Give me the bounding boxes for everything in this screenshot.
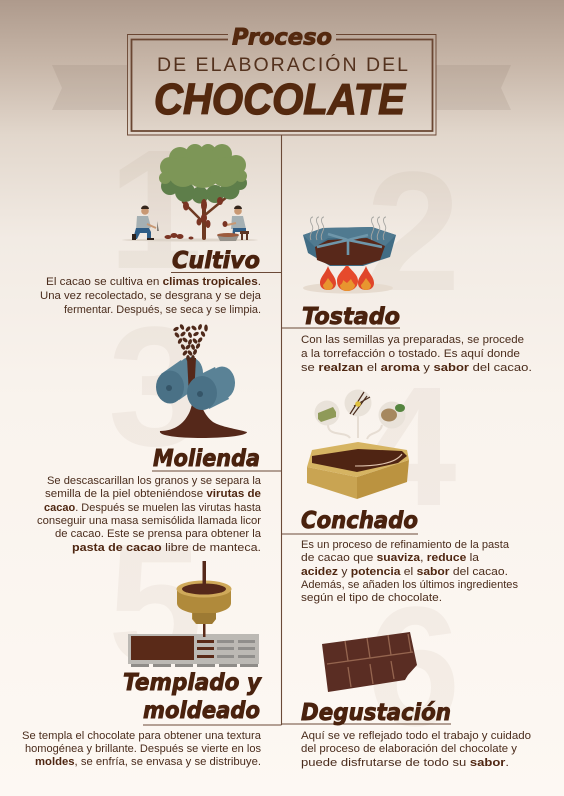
illustration: molienda, rollers and beans bbox=[156, 324, 247, 438]
left roller bbox=[156, 357, 203, 404]
illustration: cultivo, tree and farmers bbox=[122, 144, 258, 242]
text: Templado: Se templa el chocolate para obtener una textura bbox=[22, 730, 262, 742]
tray rim bbox=[307, 442, 409, 477]
falling stream bbox=[187, 358, 196, 396]
tray bbox=[307, 467, 357, 499]
text: Molienda: Se descascarillan los granos y se separa la bbox=[47, 475, 262, 487]
text: Cultivo: El cacao se cultiva en climas tropicales . bbox=[46, 276, 261, 288]
heading: Cultivo: Cultivo bbox=[172, 248, 260, 274]
chocolate in tray bbox=[312, 449, 407, 472]
text: Conchado: Es un proceso de refinamiento de la pasta bbox=[301, 539, 510, 551]
heading: Tostado: Tostado bbox=[302, 304, 400, 330]
steam bbox=[310, 217, 386, 240]
pan body bbox=[303, 227, 396, 266]
text: Molienda: cacao. Después se muelen las virutas hasta bbox=[44, 502, 262, 514]
central timeline bbox=[143, 135, 451, 725]
chocolate pool bbox=[160, 391, 247, 438]
text: Templado: homogénea y brillante. Después se vierte en los bbox=[25, 743, 261, 755]
cacao pods bbox=[164, 197, 223, 240]
text: Molienda: de cacao. Este se prensa para obtener la bbox=[55, 528, 262, 540]
text: Molienda bbox=[37, 475, 262, 554]
illustration: chocolate bar bbox=[322, 632, 417, 692]
text: Degustación: puede disfrutarse de todo su sabor . bbox=[301, 757, 509, 769]
illustration: templado, tempering bowl and mould bbox=[128, 561, 259, 667]
title line: Proceso: Proceso bbox=[232, 26, 332, 50]
illustration: tostado, pan over fire bbox=[303, 217, 396, 294]
pouring stream bbox=[196, 561, 212, 590]
heading: Templado y moldeado: Templado y bbox=[123, 670, 262, 696]
text: Tostado: Con las semillas ya preparadas, se procede bbox=[301, 334, 524, 346]
right farmer bbox=[217, 206, 249, 241]
text: Cultivo bbox=[40, 276, 262, 316]
nozzle stream bbox=[203, 622, 206, 637]
pan rim bbox=[303, 227, 396, 247]
text: Templado bbox=[22, 730, 262, 768]
bubble: nuts bbox=[378, 402, 406, 428]
text: Cultivo: fermentar. Después, se seca y se limpia. bbox=[64, 304, 261, 316]
filled chocolate mould bbox=[131, 636, 194, 660]
heading: Degustación: Degustación bbox=[301, 700, 451, 726]
tree trunk bbox=[183, 196, 228, 238]
bowl bbox=[177, 591, 231, 624]
text: Cultivo: Una vez recolectado, se desgrana y se deja bbox=[40, 290, 262, 302]
text: Molienda: pasta de cacao libre de manteca. bbox=[72, 542, 261, 554]
big step numbers: 4 bbox=[362, 352, 457, 542]
heading: Templado y moldeado: moldeado bbox=[143, 698, 260, 724]
illustration: conchado, tray and ingredients bbox=[307, 390, 409, 499]
text: Templado: moldes, se enfría, se envasa y se distribuye. bbox=[35, 756, 261, 768]
mould cavities bbox=[197, 640, 214, 658]
flames bbox=[320, 264, 374, 291]
text: Degustación: Aquí se ve reflejado todo el trabajo y cuidado bbox=[301, 730, 531, 742]
text: Tostado: se realzan el aroma y sabor del cacao. bbox=[301, 362, 532, 374]
title block bbox=[128, 26, 436, 135]
ingredient connectors bbox=[328, 416, 382, 439]
title line: chocolate: CHOCOLATE bbox=[154, 75, 407, 124]
chocolate in pan bbox=[315, 238, 385, 265]
title line: de elaboración del: DE ELABORACIÓN DEL bbox=[157, 53, 408, 76]
heading: Conchado: Conchado bbox=[301, 508, 418, 534]
bubble: vanilla bbox=[344, 390, 372, 416]
ribbon behind title bbox=[52, 65, 511, 110]
text: Conchado: de cacao que suaviza, reduce la bbox=[301, 552, 480, 564]
heading: Molienda: Molienda bbox=[153, 446, 260, 472]
big step numbers: 3 bbox=[108, 292, 203, 482]
text: Degustación: del proceso de elaboración del chocolate y bbox=[301, 743, 517, 755]
text: Conchado: acidez y potencia el sabor del cacao. bbox=[301, 566, 508, 578]
text: Tostado bbox=[301, 334, 532, 374]
tree canopy bbox=[159, 144, 247, 204]
big step numbers: 5 bbox=[108, 509, 203, 699]
mould tray bbox=[128, 634, 259, 664]
big step numbers: 6 bbox=[366, 572, 461, 762]
text: Conchado: Además, se añaden los últimos ingredientes bbox=[301, 579, 518, 591]
text: Tostado: a la torrefacción o tostado. Es aquí donde bbox=[301, 348, 520, 360]
heading: Templado y moldeado bbox=[123, 670, 262, 724]
text: Molienda: semilla de la piel obteniéndose virutas de bbox=[45, 488, 261, 500]
stirring blades bbox=[317, 234, 382, 255]
text: Conchado bbox=[301, 539, 518, 604]
title frame bbox=[128, 34, 436, 135]
bubble: matcha bbox=[314, 400, 340, 426]
text: Degustación bbox=[301, 730, 531, 769]
chocolate shine bbox=[355, 454, 402, 466]
big step numbers: 2 bbox=[366, 137, 461, 327]
text: Conchado: según el tipo de chocolate. bbox=[301, 592, 442, 604]
text: Molienda: conseguir una masa semisólida llamada licor bbox=[37, 515, 261, 527]
cacao beans bbox=[173, 324, 208, 361]
big step numbers bbox=[108, 115, 461, 762]
right roller bbox=[187, 366, 235, 410]
big step numbers: 1 bbox=[108, 115, 203, 305]
left farmer bbox=[132, 206, 159, 240]
